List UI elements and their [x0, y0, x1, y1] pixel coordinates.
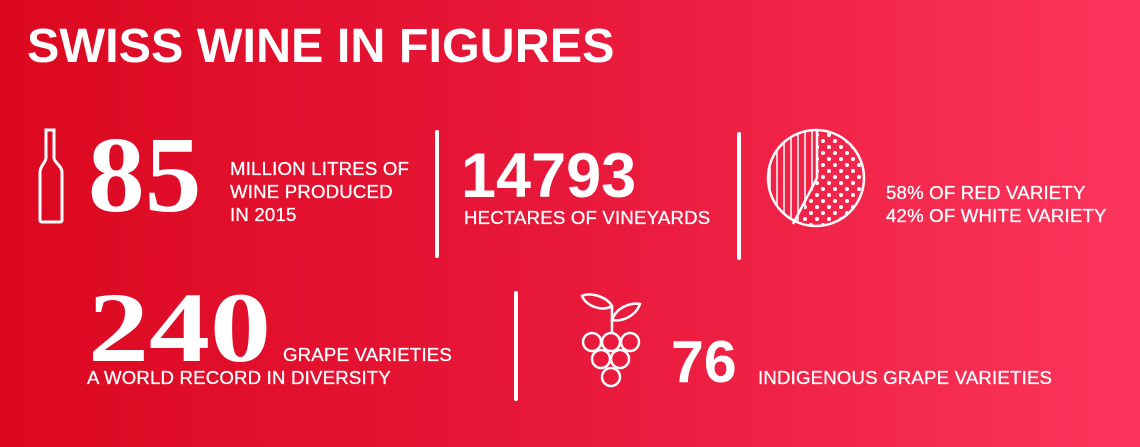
- text: world record: A WORLD RECORD IN DIVERSITY: [87, 367, 391, 388]
- text: red/white variety: [886, 182, 1107, 226]
- stat: 14793: 14793: [461, 141, 636, 211]
- text: million litres: MILLION LITRES OF: [230, 158, 409, 179]
- stat: 76: 76: [671, 329, 737, 395]
- icon: grapes: [580, 293, 642, 388]
- stat: 240: 240: [88, 272, 271, 383]
- text: red/white variety: 42% OF WHITE VARIETY: [886, 205, 1107, 226]
- text: red/white variety: 58% OF RED VARIETY: [886, 182, 1086, 203]
- stat: 85: 85: [88, 116, 201, 235]
- text: indigenous: INDIGENOUS GRAPE VARIETIES: [758, 367, 1052, 388]
- text: million litres: WINE PRODUCED: [230, 181, 393, 202]
- text: hectares: HECTARES OF VINEYARDS: [464, 207, 710, 228]
- text: million litres: [230, 158, 409, 225]
- title: SWISS WINE IN FIGURES: [27, 19, 614, 73]
- chart: pie red/white: [766, 128, 866, 228]
- text: grape varieties: GRAPE VARIETIES: [283, 344, 452, 365]
- icon: wine bottle: [38, 128, 64, 224]
- text: million litres: IN 2015: [230, 204, 297, 225]
